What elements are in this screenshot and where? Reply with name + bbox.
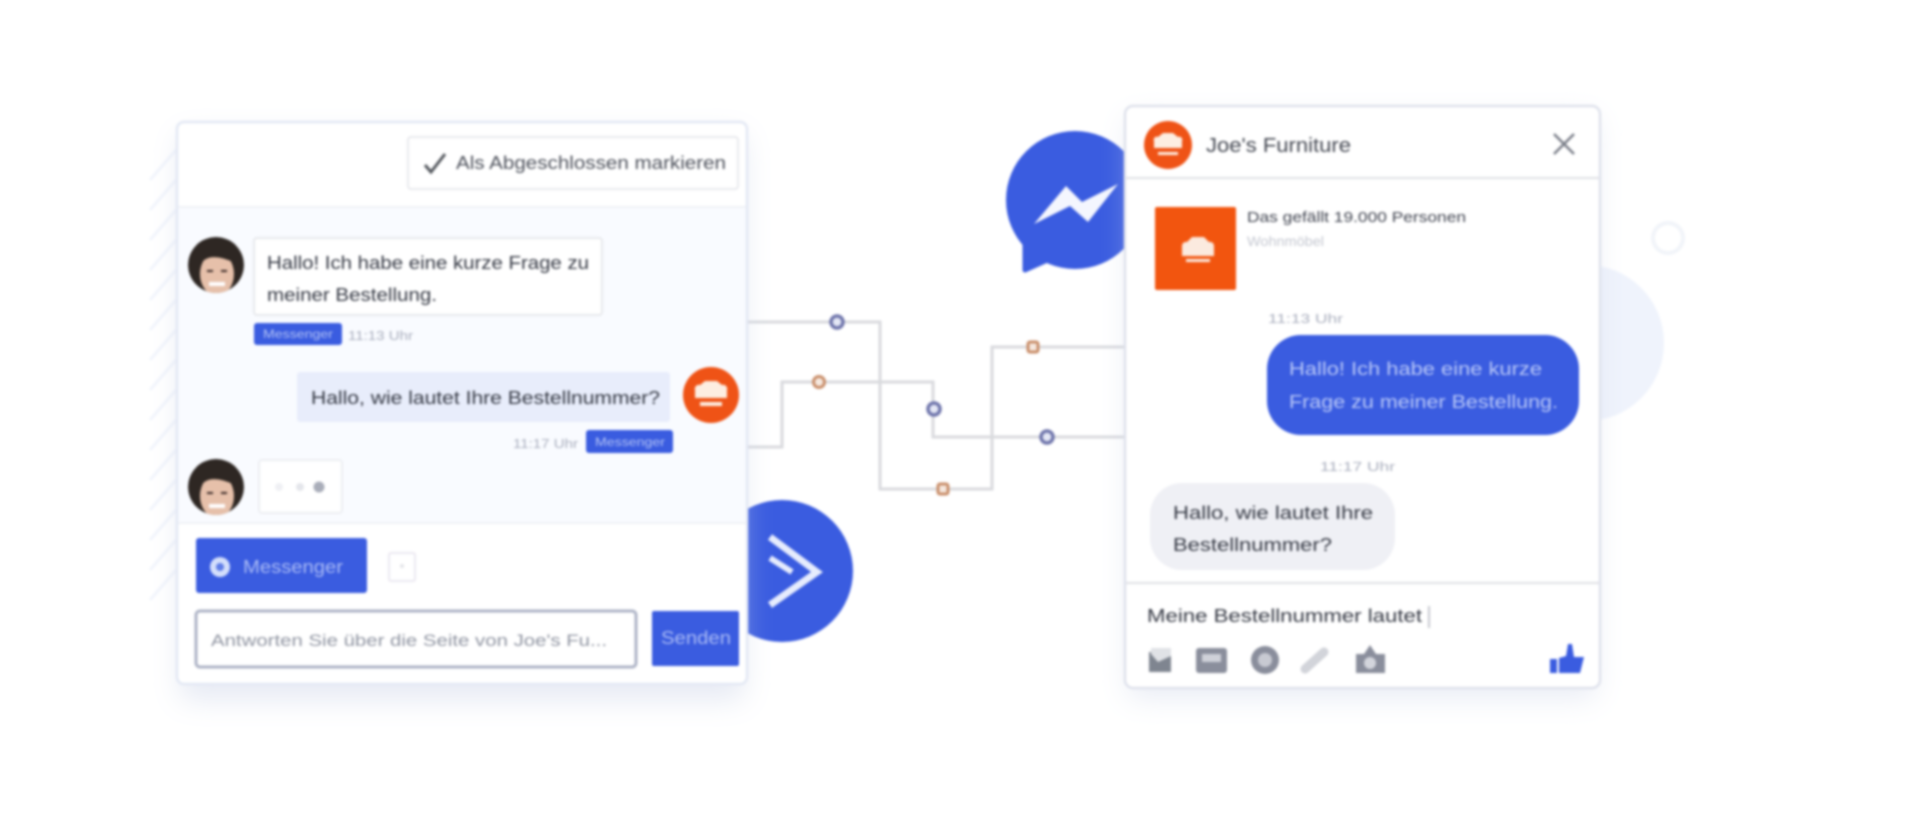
avatar: customer — [188, 237, 244, 296]
avatar: furniture brand — [683, 367, 739, 423]
icon: Messenger logo — [1006, 131, 1144, 270]
icon: thumbs up — [1550, 644, 1584, 673]
message bubble: customer question — [254, 238, 602, 315]
connector lines between panels — [748, 316, 1125, 494]
avatar: customer typing — [188, 459, 244, 518]
panel: messenger chat — [1125, 106, 1600, 698]
message bubble: customer blue — [1267, 335, 1579, 435]
message bubble: agent reply: Hallo, wie lautet Ihre Bestellnummer? — [311, 388, 660, 408]
tag: messenger with time: 11:13 Uhr — [348, 328, 414, 343]
composer icons — [1149, 645, 1385, 674]
tag: time with messenger — [513, 430, 673, 453]
message bubble: customer question: meiner Bestellung. — [267, 285, 437, 305]
message bubble: reply grey — [1150, 483, 1395, 570]
text input: Meine Bestellnummer lautet — [1147, 606, 1422, 626]
decorative stripes left of the panel — [150, 150, 176, 600]
message bubble: reply grey: Hallo, wie lautet Ihre — [1173, 503, 1373, 523]
decorative circle behind right panel — [1508, 265, 1664, 421]
message bubble: customer blue: Hallo! Ich habe eine kurze — [1289, 359, 1542, 379]
tag: messenger with time: Messenger — [263, 327, 333, 341]
heading: page name: Joe's Furniture — [1206, 135, 1351, 157]
panel: agent inbox — [177, 122, 747, 700]
button: mark as closed — [408, 137, 738, 189]
typing indicator bubble — [259, 460, 342, 513]
icon: ActiveCampaign logo circle — [711, 500, 853, 642]
message bubble: reply grey: Bestellnummer? — [1173, 535, 1332, 555]
button: messenger channel: Messenger — [243, 557, 343, 577]
message bubble: agent reply — [297, 372, 670, 422]
button: send — [652, 611, 739, 666]
button: messenger channel — [196, 538, 367, 593]
timestamp: 11:13 Uhr — [1268, 311, 1344, 326]
decorative ring — [1653, 223, 1683, 253]
timestamp: 11:17 Uhr — [1320, 459, 1396, 474]
page card — [1155, 207, 1466, 290]
tag: messenger with time — [254, 323, 414, 345]
tag: time with messenger: 11:17 Uhr — [513, 436, 579, 451]
reply input: Antworten Sie über die Seite von Joe's Fu... — [211, 631, 607, 650]
avatar: furniture brand header — [1144, 121, 1192, 169]
button: mark as closed: Als Abgeschlossen markieren — [456, 153, 726, 173]
message bubble: customer question: Hallo! Ich habe eine kurze Frage zu — [267, 253, 589, 273]
message bubble: customer blue: Frage zu meiner Bestellung. — [1289, 392, 1558, 412]
reply input — [196, 611, 636, 667]
page card: Wohnmöbel — [1247, 233, 1324, 249]
button: send: Senden — [661, 628, 731, 648]
tag: time with messenger: Messenger — [595, 435, 665, 449]
page card: Das gefällt 19.000 Personen — [1247, 209, 1466, 226]
icon: close — [1554, 134, 1574, 154]
icon: emoji placeholder — [389, 553, 415, 581]
